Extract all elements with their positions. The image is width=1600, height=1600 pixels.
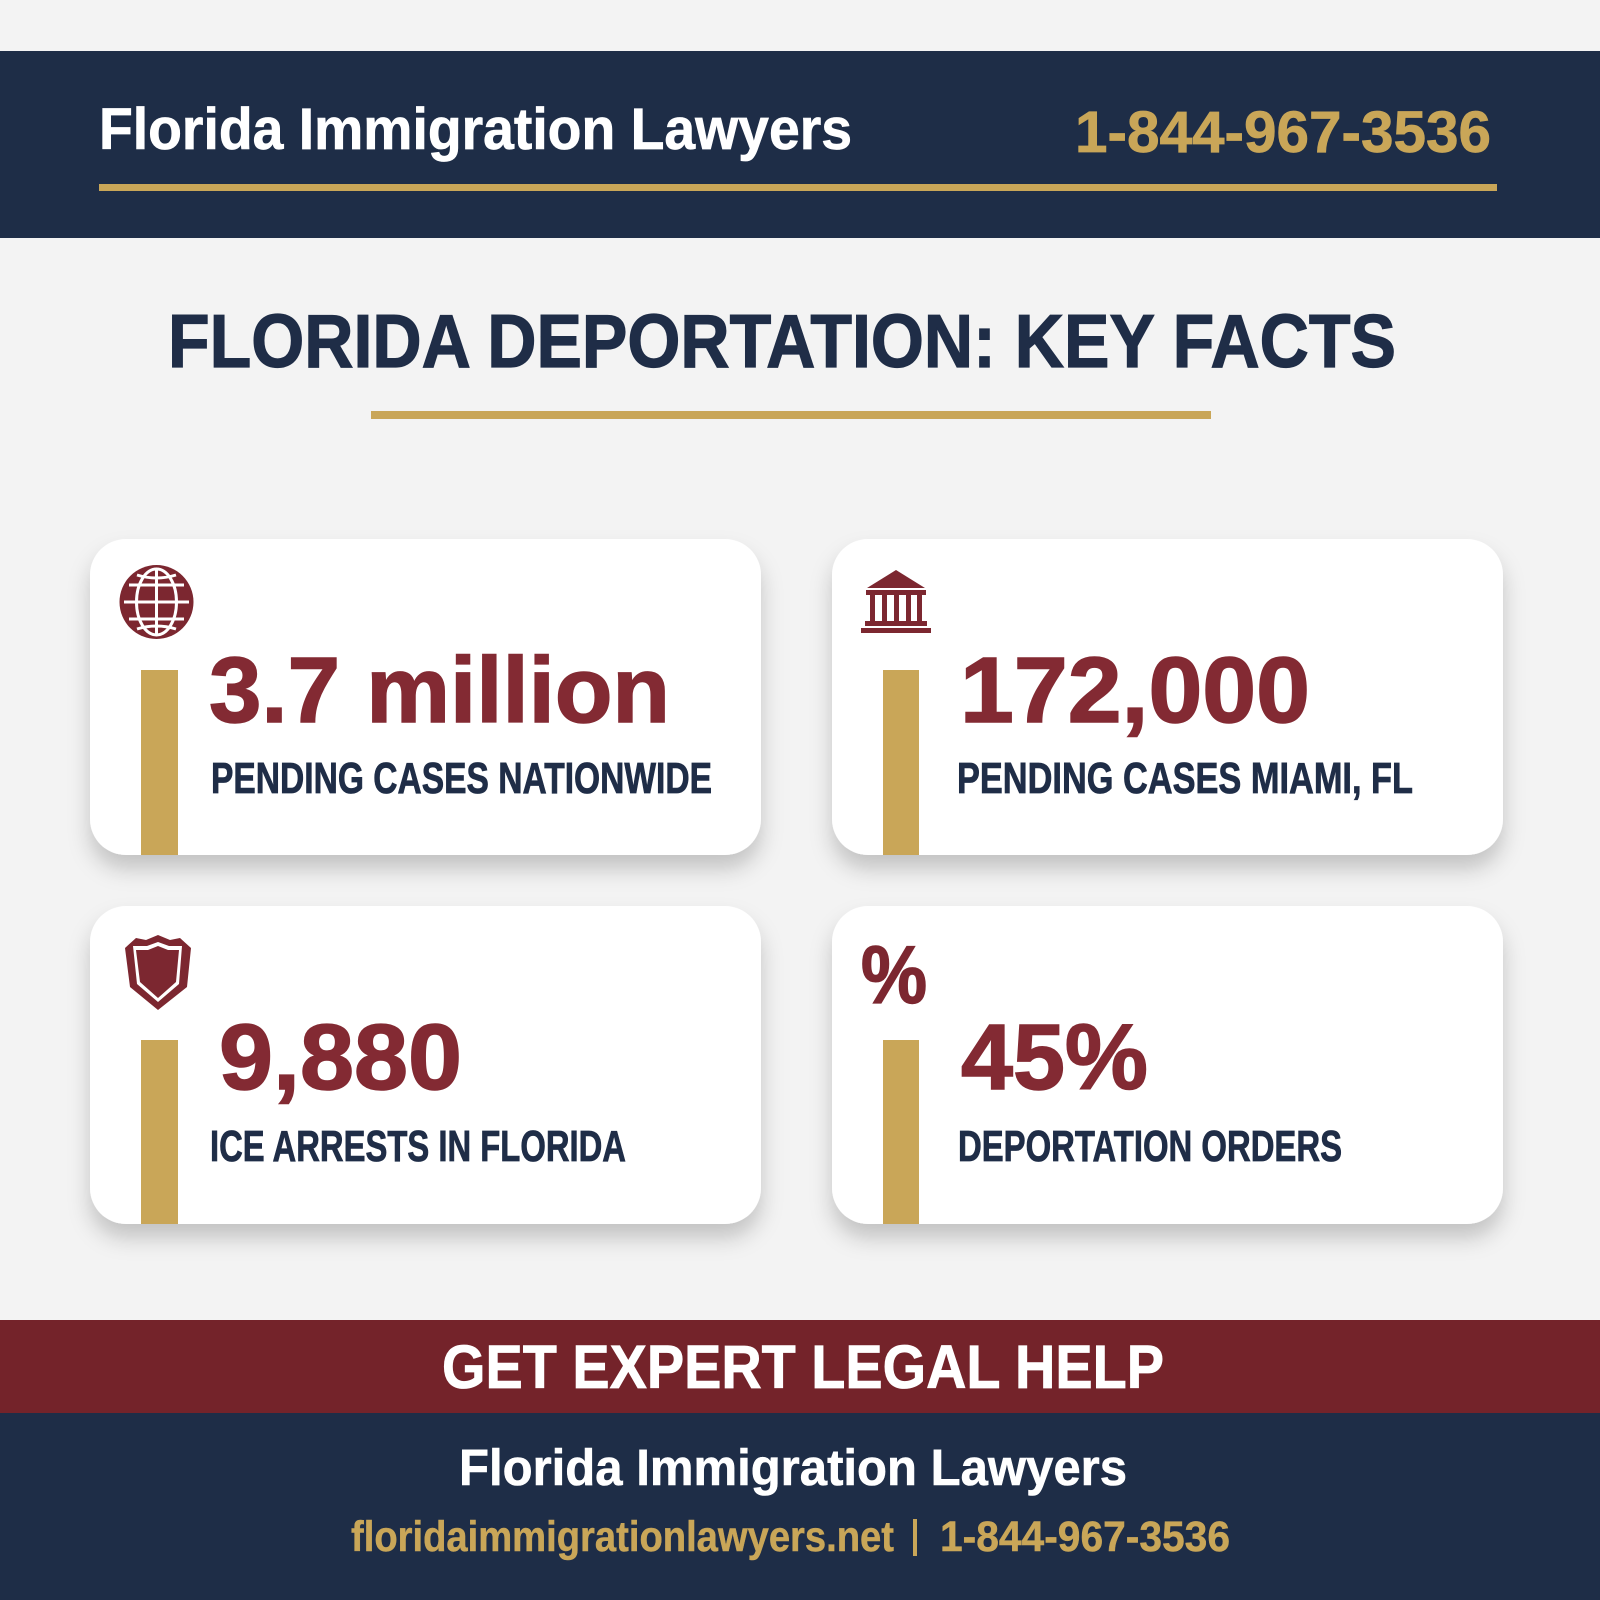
stat: 3.7 million: 3.7 million	[209, 638, 670, 742]
gold bar	[141, 670, 178, 855]
panel: deportation orders	[832, 906, 1503, 1224]
footer website and phone: 1-844-967-3536	[940, 1513, 1230, 1561]
stat: 9,880: 9,880	[219, 1005, 462, 1109]
label: pending cases nationwide: PENDING CASES NATIONWIDE	[211, 754, 712, 803]
footer firm name: Florida Immigration Lawyers	[459, 1439, 1127, 1496]
call to action band	[0, 1320, 1600, 1413]
icon: percent sign: %	[861, 930, 927, 1021]
gold bar	[883, 670, 919, 855]
panel: pending cases nationwide	[90, 539, 761, 855]
stat: 172,000: 172,000	[960, 638, 1310, 742]
label: pending cases Miami: PENDING CASES MIAMI, FL	[957, 754, 1413, 803]
call to action text: GET EXPERT LEGAL HELP	[442, 1333, 1164, 1401]
footer website and phone	[351, 1513, 1230, 1561]
icon: courthouse	[861, 570, 931, 633]
panel: ICE arrests	[90, 906, 761, 1224]
header gold rule	[99, 184, 1497, 191]
title underline	[371, 411, 1211, 419]
stat: 45%: 45%	[961, 1005, 1148, 1109]
header band	[0, 51, 1600, 238]
gold bar	[883, 1040, 919, 1224]
header phone number: 1-844-967-3536	[1075, 100, 1491, 165]
icon: globe	[120, 565, 194, 639]
footer website and phone: floridaimmigrationlawyers.net	[351, 1513, 894, 1561]
title: FLORIDA DEPORTATION: KEY FACTS	[168, 299, 1396, 383]
panel: pending cases Miami	[832, 539, 1503, 855]
header firm name: Florida Immigration Lawyers	[99, 97, 852, 162]
icon: shield	[125, 935, 191, 1010]
label: deportation orders: DEPORTATION ORDERS	[958, 1122, 1342, 1171]
gold bar	[141, 1040, 178, 1224]
footer band	[0, 1413, 1600, 1600]
label: ICE arrests in Florida: ICE ARRESTS IN FLORIDA	[210, 1122, 626, 1171]
